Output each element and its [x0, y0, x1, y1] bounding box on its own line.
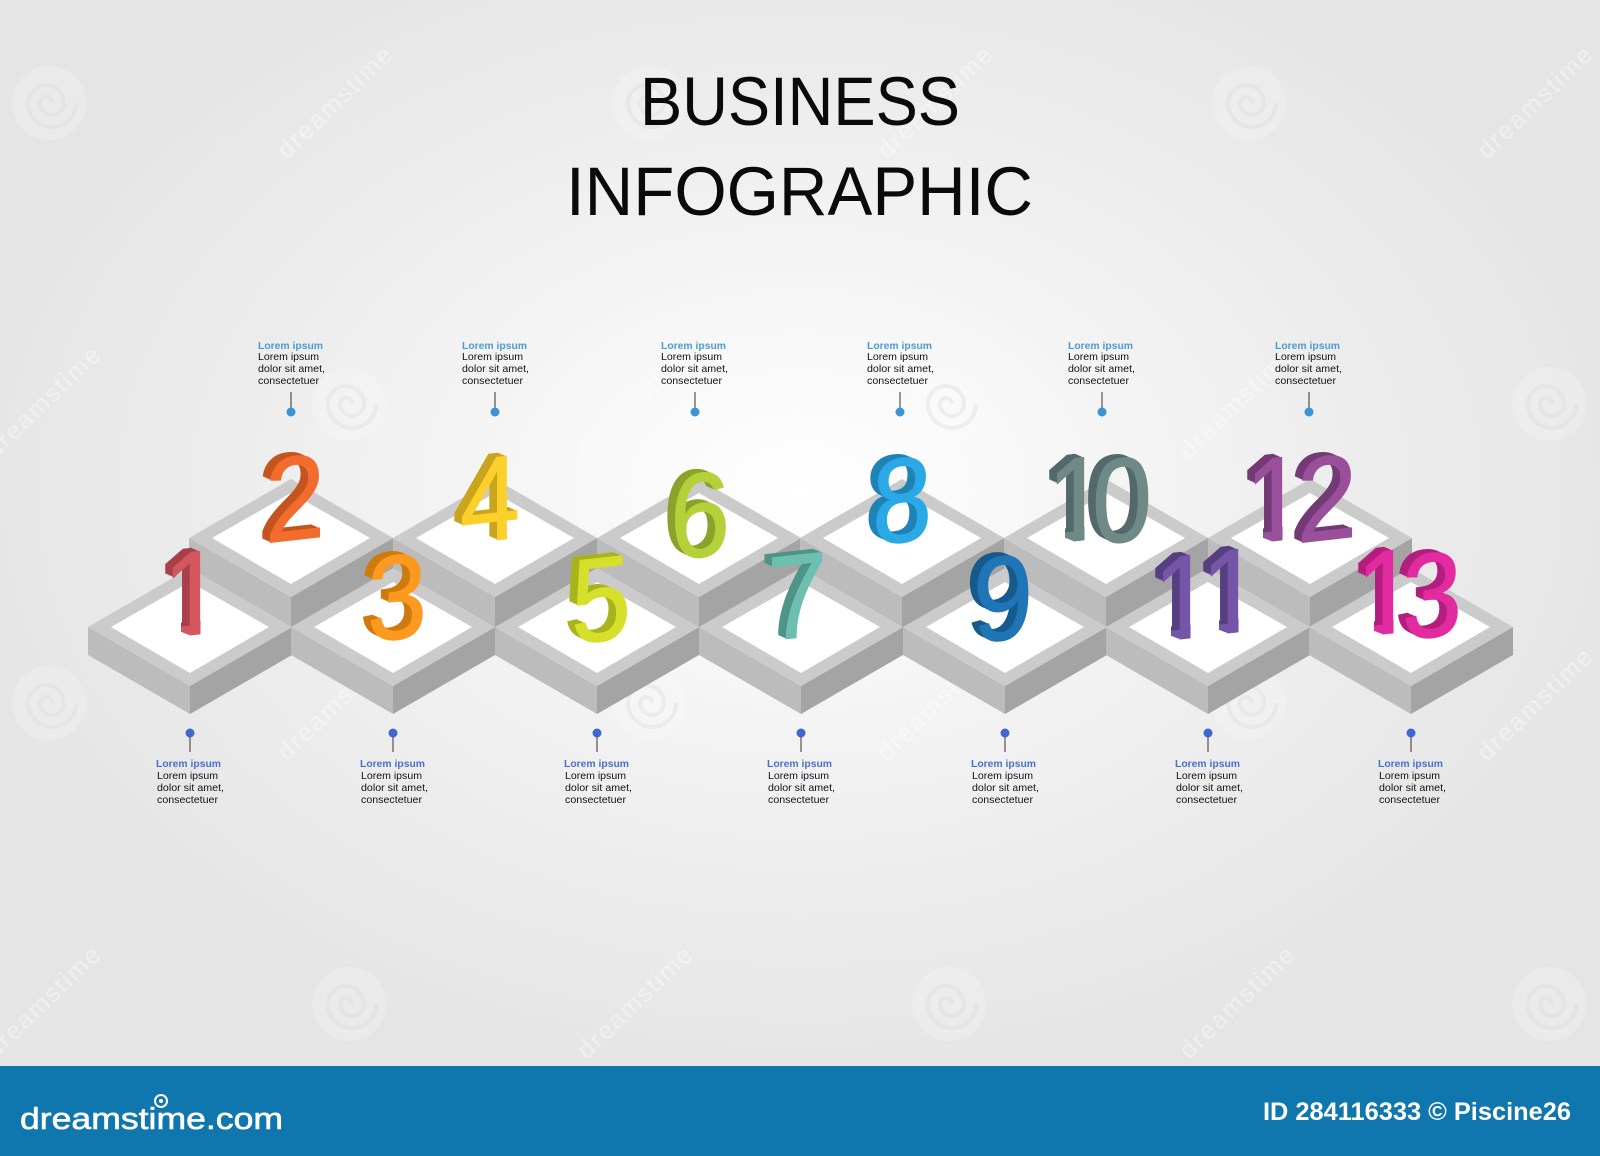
title: BUSINESS: [640, 63, 960, 140]
callout 10: Lorem ipsum: [1068, 351, 1129, 363]
callout 9: dolor sit amet,: [972, 782, 1039, 794]
callout 9: [971, 728, 1039, 806]
footer logo: dreamstime.com: [20, 1101, 283, 1136]
tile 12: [1208, 479, 1412, 628]
tile 11: [1106, 568, 1310, 714]
callout 8: Lorem ipsum: [867, 351, 928, 363]
callout 12: dolor sit amet,: [1275, 363, 1342, 375]
number 4: 4: [460, 429, 520, 570]
number 9: 9: [973, 528, 1033, 669]
callout 11: consectetuer: [1176, 794, 1238, 806]
title: INFOGRAPHIC: [566, 153, 1033, 230]
callout 3: dolor sit amet,: [361, 782, 428, 794]
text: 1: [1245, 429, 1305, 570]
tile 8: [800, 479, 1004, 628]
title: [566, 63, 1033, 230]
watermark text: dreamstime: [1472, 642, 1599, 766]
callout 8: Lorem ipsum: [867, 340, 932, 352]
callout 10: consectetuer: [1068, 375, 1130, 387]
callout 7: consectetuer: [768, 794, 830, 806]
callout 6: consectetuer: [661, 375, 723, 387]
callout 9: Lorem ipsum: [972, 770, 1033, 782]
number 10: [1049, 430, 1152, 571]
callout 1: Lorem ipsum: [157, 770, 218, 782]
callout 3: Lorem ipsum: [360, 758, 425, 770]
text: 1: [1356, 522, 1416, 663]
callout 1: dolor sit amet,: [157, 782, 224, 794]
text: 0: [1092, 430, 1152, 571]
callout 11: Lorem ipsum: [1175, 758, 1240, 770]
tile 10: [1004, 479, 1208, 628]
watermark text: dreamstime: [272, 40, 399, 164]
callout 11: dolor sit amet,: [1176, 782, 1243, 794]
callout 13: dolor sit amet,: [1379, 782, 1446, 794]
number 13: [1358, 525, 1462, 666]
callout 12: consectetuer: [1275, 375, 1337, 387]
callout 6: [661, 340, 728, 416]
callout 8: dolor sit amet,: [867, 363, 934, 375]
callout 4: consectetuer: [462, 375, 524, 387]
callout 6: Lorem ipsum: [661, 340, 726, 352]
callout 13: Lorem ipsum: [1378, 758, 1443, 770]
tile 4: [393, 479, 597, 628]
callout 4: Lorem ipsum: [462, 340, 527, 352]
tile 6: [597, 479, 801, 628]
callout 1: Lorem ipsum: [156, 758, 221, 770]
watermark text: dreamstime: [1174, 940, 1301, 1064]
number 12: [1247, 428, 1357, 569]
number 7: 7: [767, 526, 827, 667]
callout 3: consectetuer: [361, 794, 423, 806]
callout 13: [1378, 728, 1446, 806]
tile 2: [189, 479, 393, 628]
number 3: 3: [367, 527, 427, 668]
callout 1: consectetuer: [157, 794, 219, 806]
callout 7: Lorem ipsum: [767, 758, 832, 770]
watermark text: dreamstime: [272, 642, 399, 766]
callout 10: dolor sit amet,: [1068, 363, 1135, 375]
text: 1: [1047, 429, 1107, 570]
callout 2: consectetuer: [258, 375, 320, 387]
callout 5: [564, 728, 632, 806]
callout 11: Lorem ipsum: [1176, 770, 1237, 782]
tile 9: [903, 568, 1107, 714]
callout 10: Lorem ipsum: [1068, 340, 1133, 352]
watermark text: dreamstime: [872, 40, 999, 164]
callout 8: [867, 340, 934, 416]
callout 7: Lorem ipsum: [768, 770, 829, 782]
callout 4: dolor sit amet,: [462, 363, 529, 375]
callout 7: [767, 728, 835, 806]
text: 2: [1297, 428, 1357, 569]
footer credit: ID 284116333 © Piscine26: [1263, 1098, 1571, 1126]
tile 5: [495, 568, 699, 714]
callout 2: Lorem ipsum: [258, 340, 323, 352]
tile 3: [291, 568, 495, 714]
watermark text: dreamstime: [872, 642, 999, 766]
number 2: 2: [265, 428, 325, 569]
callout 4: [462, 340, 529, 416]
callout 5: consectetuer: [565, 794, 627, 806]
number 11: [1155, 546, 1238, 640]
callout 10: [1068, 340, 1135, 416]
callout 6: Lorem ipsum: [661, 351, 722, 363]
callout 5: Lorem ipsum: [565, 770, 626, 782]
callout 7: dolor sit amet,: [768, 782, 835, 794]
text: 3: [1402, 525, 1462, 666]
callout 12: [1275, 340, 1342, 416]
callout 11: [1175, 728, 1243, 806]
tile 7: [699, 568, 903, 714]
tile 13: [1309, 568, 1513, 714]
text: 1: [1201, 521, 1261, 662]
number 8: 8: [872, 430, 932, 571]
callout 2: dolor sit amet,: [258, 363, 325, 375]
isometric tile row: even steps (back): [189, 479, 1412, 628]
callout 8: consectetuer: [867, 375, 929, 387]
number 6: 6: [670, 445, 730, 586]
callout 1: [156, 728, 224, 806]
number 5: 5: [571, 529, 631, 670]
callout 5: dolor sit amet,: [565, 782, 632, 794]
isometric tile row: odd steps (front): [88, 568, 1513, 714]
watermark text: dreamstime: [572, 340, 699, 464]
callout 13: consectetuer: [1379, 794, 1441, 806]
callout 5: Lorem ipsum: [564, 758, 629, 770]
callout 9: Lorem ipsum: [971, 758, 1036, 770]
callout 2: Lorem ipsum: [258, 351, 319, 363]
callout 6: dolor sit amet,: [661, 363, 728, 375]
footer bar: [0, 1066, 1600, 1156]
callout 4: Lorem ipsum: [462, 351, 523, 363]
callout 2: [258, 340, 325, 416]
text: 1: [1153, 527, 1213, 668]
tile 1: [88, 568, 292, 714]
callout 12: Lorem ipsum: [1275, 340, 1340, 352]
watermark text: dreamstime: [572, 940, 699, 1064]
number 1: 1: [163, 523, 223, 664]
callout 3: Lorem ipsum: [361, 770, 422, 782]
watermark text: dreamstime: [1174, 340, 1301, 464]
callout 3: [360, 728, 428, 806]
callout 12: Lorem ipsum: [1275, 351, 1336, 363]
callout 9: consectetuer: [972, 794, 1034, 806]
callout 13: Lorem ipsum: [1379, 770, 1440, 782]
watermark text: dreamstime: [1472, 40, 1599, 164]
